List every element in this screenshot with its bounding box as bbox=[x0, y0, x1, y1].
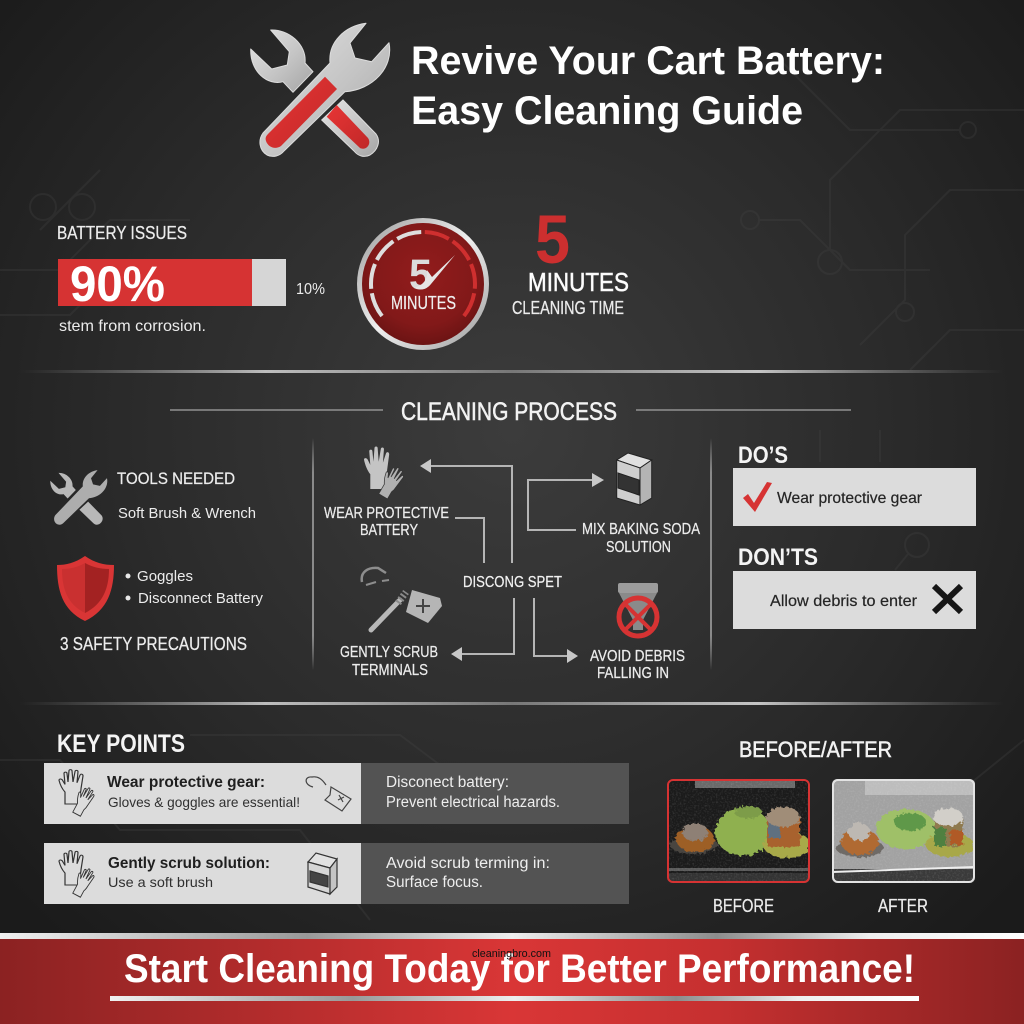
heading: don'ts: DON’TS bbox=[738, 544, 818, 571]
card: don't item: Allow debris to enter bbox=[770, 593, 918, 610]
heading: key points: KEY POINTS bbox=[57, 730, 185, 758]
label: step mix baking soda: MIX BAKING SODA bbox=[582, 521, 700, 538]
text: source credit: cleaningbro.com bbox=[472, 948, 551, 960]
photo: before bbox=[667, 779, 811, 883]
icon: crossed wrenches bbox=[251, 23, 390, 156]
card: do item: Wear protective gear bbox=[777, 490, 923, 507]
icon: gloves outline bbox=[59, 770, 96, 817]
panel: process flow bbox=[324, 446, 700, 682]
card: do item bbox=[733, 468, 976, 526]
icon: gloves outline bbox=[59, 851, 96, 898]
icon: five minute gauge bbox=[350, 211, 496, 357]
stat: five minutes cleaning time: 5 bbox=[535, 201, 570, 278]
underline bbox=[110, 996, 919, 1001]
icon: protective gloves bbox=[364, 446, 406, 500]
label: step wear protective bbox=[324, 505, 449, 539]
list: safety items bbox=[126, 568, 263, 607]
heading: before and after: BEFORE/AFTER bbox=[739, 737, 892, 762]
text: tools list: Soft Brush & Wrench bbox=[118, 505, 256, 522]
text: call to action: Start Cleaning Today for Better Performance! bbox=[124, 947, 915, 991]
text: disconnect battery: Prevent electrical hazards. bbox=[386, 794, 560, 811]
text: avoid scrub: Surface focus. bbox=[386, 874, 483, 891]
text: gently scrub solution: Gently scrub solution: bbox=[108, 855, 270, 872]
text: wear protective gear: Wear protective gear: bbox=[107, 774, 265, 791]
icon: baking soda box bbox=[617, 453, 652, 505]
text: avoid scrub: Avoid scrub terming in: bbox=[386, 855, 550, 872]
icon: brush and battery bbox=[362, 568, 442, 630]
panel: key points row two bbox=[44, 843, 629, 904]
label: after: AFTER bbox=[878, 896, 928, 916]
icon: no debris bbox=[618, 583, 658, 636]
bar chart: 90 percent bbox=[58, 256, 286, 312]
panel: do's and don'ts bbox=[733, 442, 976, 629]
label: step avoid debris: FALLING IN bbox=[597, 665, 669, 682]
label: step avoid debris bbox=[590, 648, 685, 682]
stat: five minutes cleaning time bbox=[512, 201, 629, 318]
arrow: to scrub bbox=[451, 598, 514, 661]
label: step mix baking soda: SOLUTION bbox=[606, 539, 671, 556]
heading: cleaning process: CLEANING PROCESS bbox=[401, 398, 617, 426]
icon: battery tag bbox=[306, 777, 351, 811]
panel: key points row one bbox=[44, 763, 629, 824]
text: wear protective gear bbox=[107, 774, 300, 810]
arrow: to baking soda bbox=[528, 473, 604, 530]
title bbox=[411, 39, 885, 133]
title: Revive Your Cart Battery: bbox=[411, 39, 885, 83]
heading: tools needed: TOOLS NEEDED bbox=[117, 469, 235, 488]
banner: call to action bbox=[0, 933, 1024, 1024]
label: step scrub terminals: TERMINALS bbox=[352, 662, 428, 679]
text: wear protective gear: Gloves & goggles are essential! bbox=[108, 794, 300, 810]
photo: after bbox=[832, 779, 975, 883]
arrow: to gloves bbox=[420, 459, 512, 563]
text: avoid scrub bbox=[386, 855, 550, 891]
heading: safety precautions: 3 SAFETY PRECAUTIONS bbox=[60, 634, 247, 654]
icon: five minute gauge: 5 bbox=[409, 251, 432, 299]
caption: corrosion: stem from corrosion. bbox=[59, 318, 206, 335]
label: step avoid debris: AVOID DEBRIS bbox=[590, 648, 685, 665]
label: step scrub terminals bbox=[340, 644, 438, 679]
icon: soda box outline bbox=[308, 853, 337, 894]
connector: from wear protective bbox=[455, 518, 484, 563]
heading: do's: DO’S bbox=[738, 442, 788, 469]
text: disconnect battery bbox=[386, 774, 560, 811]
label: center step: DISCONG SPET bbox=[463, 574, 562, 591]
list: safety items: Goggles bbox=[137, 568, 193, 585]
icon: small wrenches bbox=[50, 470, 107, 525]
text: disconnect battery: Disconect battery: bbox=[386, 774, 509, 791]
arrow: to avoid debris bbox=[534, 598, 578, 663]
stat: five minutes cleaning time: CLEANING TIME bbox=[512, 298, 624, 318]
card: don't item bbox=[733, 571, 976, 629]
panel: battery issues stat bbox=[57, 223, 325, 335]
bar chart: 90 percent: 90% bbox=[70, 256, 165, 312]
text: gently scrub solution bbox=[108, 855, 270, 890]
stat: five minutes cleaning time: MINUTES bbox=[528, 267, 629, 297]
panel: tools and safety bbox=[50, 469, 263, 654]
label: step scrub terminals: GENTLY SCRUB bbox=[340, 644, 438, 661]
text: gently scrub solution: Use a soft brush bbox=[108, 874, 213, 890]
list: safety items: Disconnect Battery bbox=[138, 590, 263, 607]
label: step mix baking soda bbox=[582, 521, 700, 556]
label: before: BEFORE bbox=[713, 896, 774, 916]
heading: battery issues: BATTERY ISSUES bbox=[57, 223, 187, 243]
icon: five minute gauge: MINUTES bbox=[391, 293, 456, 313]
label: step wear protective: BATTERY bbox=[360, 522, 418, 539]
icon: shield bbox=[57, 556, 114, 621]
label: 10 percent: 10% bbox=[296, 281, 325, 298]
title: Easy Cleaning Guide bbox=[411, 89, 803, 133]
label: step wear protective: WEAR PROTECTIVE bbox=[324, 505, 449, 522]
